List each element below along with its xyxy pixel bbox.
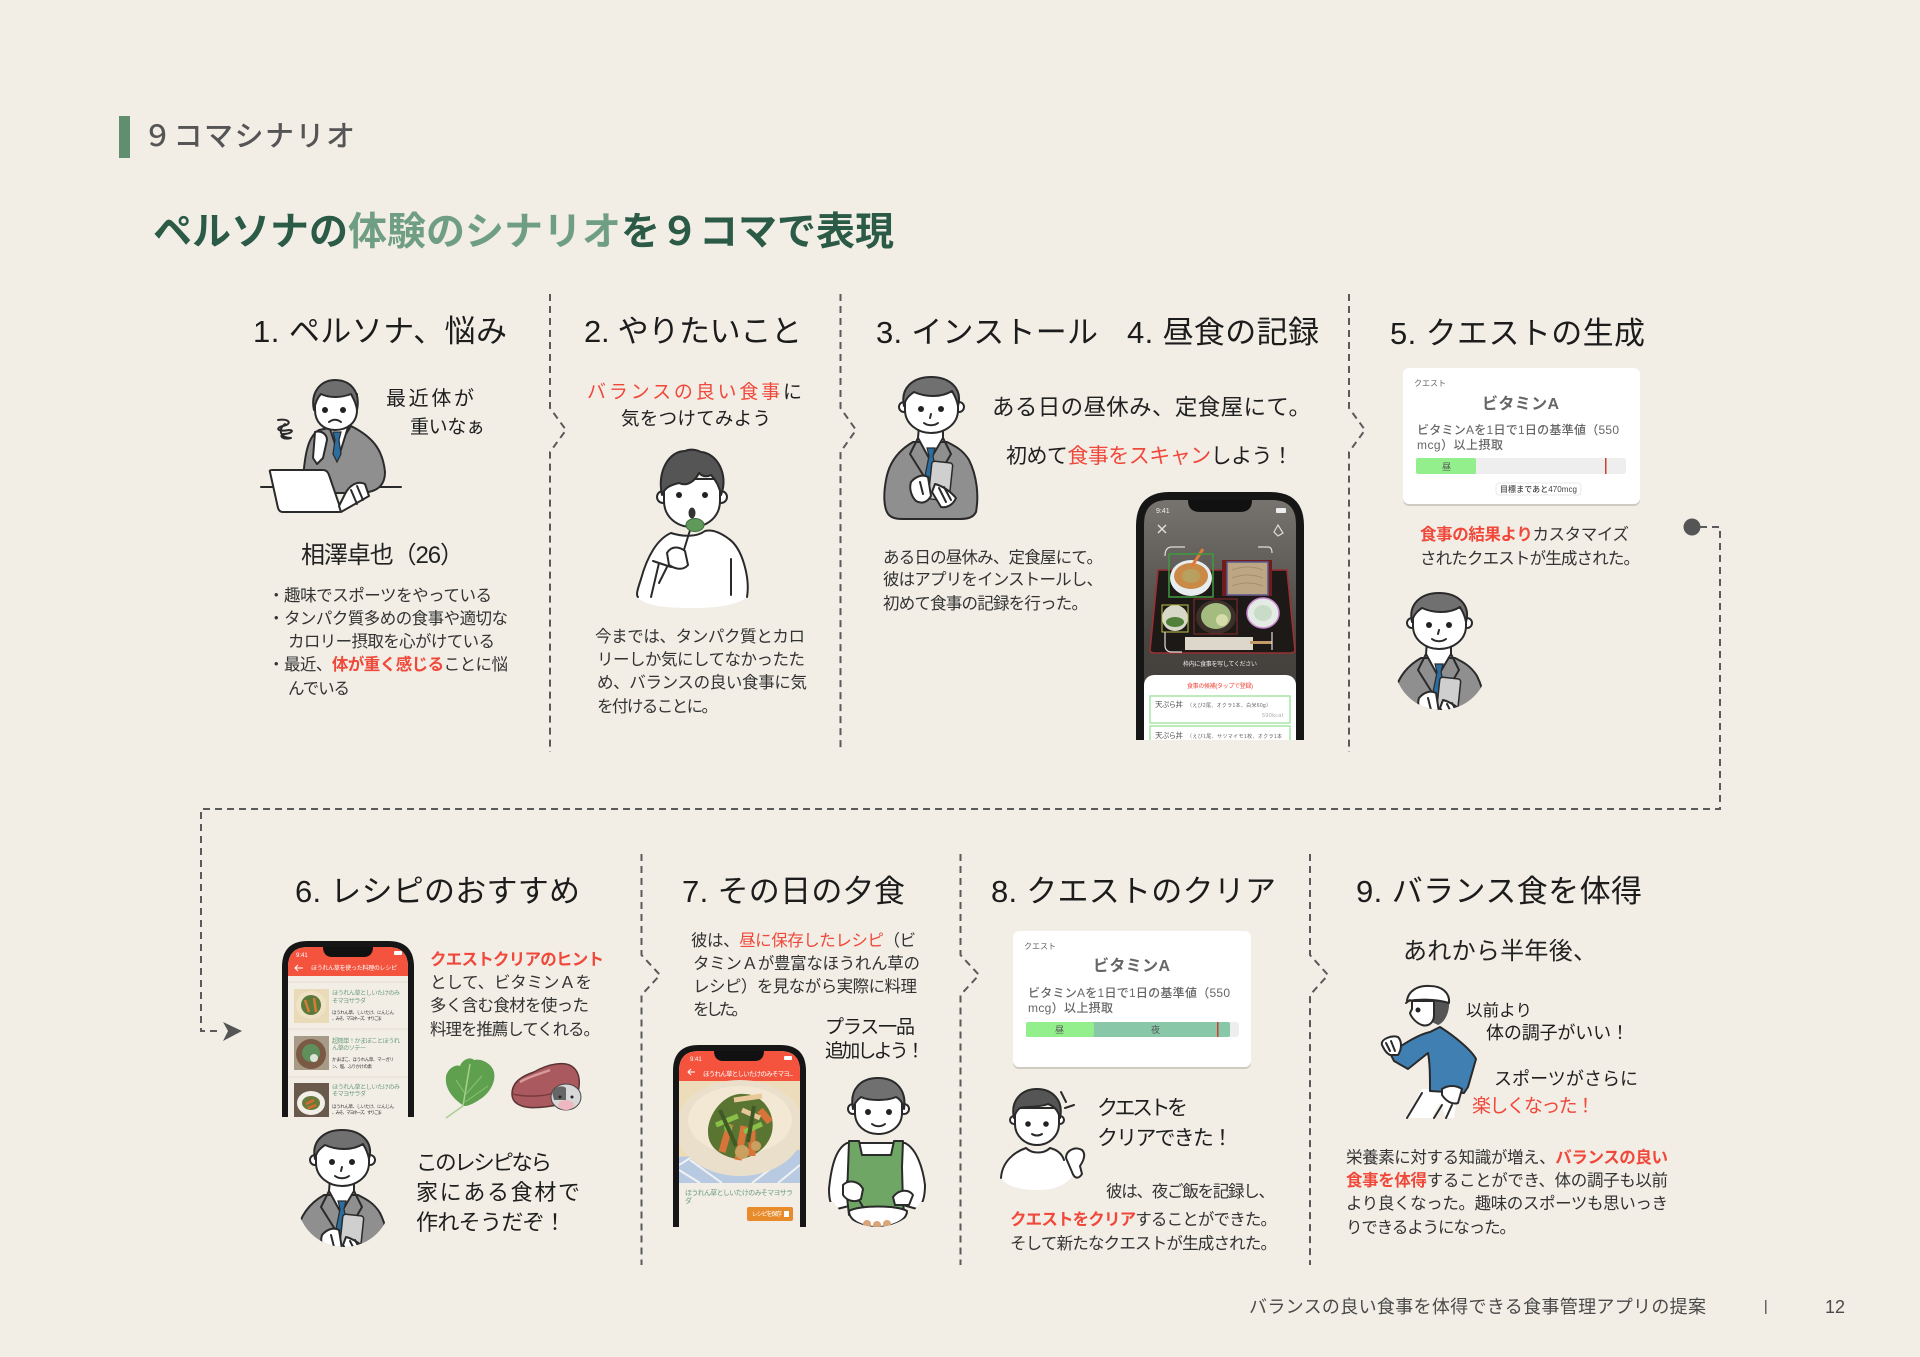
quest card: mcg）以上摂取 [1417, 437, 1503, 452]
phone: recipe list: 、みそ、マヨネーズ、すりごま [332, 1015, 382, 1022]
speech: cleared the quest: クリアできた！ [1097, 1127, 1233, 1150]
phone: recipe detail: ほうれん草としいたけのみそマヨ... [703, 1069, 793, 1078]
panel: step 9 balanced diet mastered [1346, 874, 1668, 1237]
quest card cleared: 夜 [1151, 1025, 1160, 1035]
main title: ペルソナの体験のシナリオを９コマで表現 [153, 211, 894, 254]
infographic page [119, 116, 1844, 1315]
recipe 1 [294, 989, 329, 1023]
heading: step 3: 3. インストール [876, 315, 1098, 350]
phone: meal scan screen: 9:41 [1156, 508, 1170, 515]
recipe hint description: として、ビタミンＡを [430, 973, 592, 992]
quest card cleared: ビタミンAを1日で1日の基準値（550 [1028, 985, 1230, 1000]
phone: meal scan screen: 天ぷら丼 [1155, 699, 1184, 709]
recipe hint description: クエストクリアのヒント [430, 950, 604, 969]
step 7 description: をした。 [693, 1000, 748, 1019]
phone: recipe list: ほうれん草、しいたけ、にんじん [332, 1103, 394, 1110]
icon: worried man at laptop [261, 380, 401, 512]
persona bullets: カロリー摂取を心がけている [288, 632, 495, 651]
divider arrow 7-8 [960, 854, 979, 1265]
quest card: ビタミンA [1482, 394, 1559, 413]
step 2 description [595, 627, 807, 716]
phone: recipe detail: 9:41 [690, 1057, 702, 1063]
quest card cleared: クエスト [1024, 942, 1056, 951]
phone: recipe detail: レシピを保存 [752, 1210, 782, 1218]
panel: step 6 recipe recommendation [282, 874, 604, 1272]
speech: balanced diet [587, 381, 802, 429]
divider arrow 8-9 [1310, 854, 1328, 1265]
step 2 description: 今までは、タンパク質とカロ [595, 627, 805, 646]
heading: step 2: 2. やりたいこと [584, 314, 802, 349]
speech: can make with ingredients at home [416, 1151, 580, 1235]
panel: step 7 dinner [673, 874, 925, 1229]
step 2 description: を付けることに。 [597, 697, 718, 716]
quest card: ビタミンAを1日で1日の基準値（550 [1417, 422, 1619, 437]
persona bullets: ・趣味でスポーツをやっている [268, 586, 492, 605]
quest card [1403, 368, 1640, 506]
step 9 description [1346, 1148, 1668, 1237]
step 5 description [1420, 525, 1640, 568]
recipe hint description [430, 950, 604, 1039]
step 3 description: ある日の昼休み、定食屋にて。 [883, 548, 1103, 567]
phone: recipe list: そマヨサラダ [332, 997, 366, 1005]
panel: step 1 persona [253, 314, 508, 698]
phone: recipe list: ほうれん草としいたけのみ [332, 989, 400, 997]
quest card: クエスト [1414, 379, 1446, 388]
divider arrow 6-7 [642, 854, 660, 1265]
icon: liver and cow [512, 1064, 581, 1110]
step 8 description: クエストをクリアすることができた。 [1010, 1210, 1277, 1229]
speech: body feels heavy: 重いなぁ [410, 416, 485, 438]
step 8 description: 彼は、夜ご飯を記録し、 [1106, 1182, 1275, 1201]
phone: recipe detail [673, 1045, 806, 1227]
phone: recipe list: 、みそ、マヨネーズ、すりごま [332, 1109, 382, 1116]
step 3 description: 彼はアプリをインストールし、 [883, 570, 1103, 589]
phone: recipe list: 超簡単！かまぼことほうれ [332, 1037, 401, 1045]
phone: recipe list: ん草のソテー [332, 1044, 366, 1052]
phone: meal scan screen: 天ぷら丼 [1155, 730, 1184, 740]
heading: step 4: 4. 昼食の記録 [1127, 315, 1319, 350]
icon: man with smartphone [884, 377, 977, 519]
icon: man with smartphone [300, 1129, 385, 1247]
quest card cleared: mcg）以上摂取 [1028, 1000, 1113, 1015]
speech: add one more dish: プラス一品 [825, 1016, 915, 1038]
recipe hint description: 多く含む食材を使った [430, 996, 589, 1015]
step 3 description: 初めて食事の記録を行った。 [883, 594, 1088, 613]
step 7 description [691, 931, 920, 1019]
phone: meal scan screen [1136, 492, 1304, 755]
phone: recipe detail: ほうれん草としいたけのみそマヨサラ [685, 1188, 793, 1197]
footer: 12 [1825, 1297, 1845, 1317]
speech: can make with ingredients at home: 家にある食材で [416, 1180, 580, 1205]
panel: step 2 want to do [584, 314, 807, 716]
step 3 description [883, 548, 1103, 613]
speech: sports more fun [1472, 1069, 1638, 1117]
phone: meal scan screen: （えび2尾、オクラ1本、白米60g） [1187, 702, 1271, 709]
phone: recipe list: そマヨサラダ [332, 1090, 366, 1098]
persona bullets: ・最近、体が重く感じることに悩 [268, 654, 508, 674]
phone: recipe list: ほうれん草を使った料理のレシピ [311, 964, 397, 972]
speech: body feels heavy [386, 387, 485, 438]
speech: balanced diet: 気をつけてみよう [621, 408, 771, 429]
dish photo [679, 1081, 800, 1157]
recipe 2 [294, 1036, 329, 1070]
recipe 3 [294, 1083, 329, 1117]
step 9 description: 食事を体得することができ、体の調子も以前 [1346, 1171, 1668, 1190]
step 9 description: 栄養素に対する知識が増え、バランスの良い [1346, 1148, 1668, 1167]
icon: man with smartphone [1398, 592, 1482, 710]
step 7 description: タミンＡが豊富なほうれん草の [693, 954, 920, 973]
step 5 description: 食事の結果よりカスタマイズ [1420, 525, 1629, 544]
row connector arrow [201, 518, 1720, 1041]
recipe hint description: 料理を推薦してくれる。 [430, 1020, 600, 1039]
step 2 description: め、バランスの良い食事に気 [597, 673, 807, 692]
half a year later caption: あれから半年後、 [1403, 938, 1597, 965]
persona bullets [268, 586, 508, 698]
persona name: 相澤卓也（26） [301, 542, 464, 569]
heading: step 6: 6. レシピのおすすめ [295, 874, 580, 909]
icon: boy eating broccoli [637, 450, 748, 608]
icon: running man [1382, 986, 1476, 1118]
heading: step 7: 7. その日の夕食 [682, 874, 905, 909]
quest card: 目標まであと470mcg [1500, 484, 1577, 494]
icon: happy boy raising fist [1001, 1089, 1084, 1190]
phone: recipe detail: ダ [685, 1196, 692, 1205]
phone: meal scan screen: 590kcal [1262, 713, 1283, 719]
phone: recipe list: ほうれん草としいたけのみ [332, 1083, 400, 1091]
speech: body feels heavy: 最近体が [386, 387, 474, 410]
divider arrow 4-5 [1349, 294, 1365, 752]
persona bullets: んでいる [288, 680, 350, 698]
step 9 description: より良くなった。趣味のスポーツも思いっき [1346, 1194, 1668, 1213]
step 7 description: レシピ）を見ながら実際に料理 [693, 977, 917, 996]
phone: meal scan screen: 枠内に食事を写してください [1183, 660, 1257, 668]
phone: recipe list [282, 941, 414, 1117]
step 2 description: リーしか気にしてなかったた [597, 650, 805, 669]
divider arrow 1-2 [550, 294, 566, 752]
speech: add one more dish: 追加しよう！ [825, 1040, 925, 1062]
persona bullets: ・タンパク質多めの食事や適切な [268, 609, 508, 628]
phone: meal scan screen: 食事の候補(タップで登録) [1187, 682, 1253, 690]
panel: step 5 quest generated [1390, 316, 1645, 735]
speech: can make with ingredients at home: このレシピなら [416, 1151, 552, 1175]
scan tray [1150, 570, 1295, 653]
speech: sports more fun: スポーツがさらに [1494, 1069, 1638, 1089]
icon: man cooking in apron [829, 1078, 925, 1229]
panel: step 3 and 4 install and lunch [876, 315, 1319, 755]
phone: recipe list: かまぼこ、ほうれん草、マーガリ [332, 1056, 394, 1063]
section label: ９コマシナリオ [143, 121, 355, 153]
result panel [1144, 675, 1296, 740]
step 7 description: 彼は、昼に保存したレシピ（ビ [691, 931, 916, 950]
phone: meal scan screen: （えび1尾、サツマイモ1枚、オクラ1本 [1187, 733, 1282, 740]
speech: cleared the quest [1097, 1097, 1233, 1150]
heading: step 5: 5. クエストの生成 [1390, 316, 1645, 351]
step 8 description [1010, 1182, 1277, 1253]
phone: recipe list: 9:41 [296, 953, 308, 959]
heading: step 1: 1. ペルソナ、悩み [253, 314, 507, 349]
quest card cleared: 昼 [1055, 1025, 1064, 1035]
heading: step 8: 8. クエストのクリア [991, 874, 1276, 909]
speech: feeling better: 以前より [1466, 1001, 1532, 1020]
step 5 description: されたクエストが生成された。 [1420, 549, 1640, 568]
panel: step 8 quest clear [991, 874, 1277, 1253]
speech: add one more dish [825, 1016, 925, 1062]
heading: step 9: 9. バランス食を体得 [1356, 874, 1642, 909]
footer: バランスの良い食事を体得できる食事管理アプリの提案 [1249, 1297, 1706, 1317]
speech: feeling better: 体の調子がいい！ [1486, 1023, 1629, 1043]
quest card: 昼 [1442, 462, 1451, 472]
speech: balanced diet: バランスの良い食事に [587, 381, 802, 403]
icon: spinach leaf [446, 1058, 494, 1118]
step 8 description: そして新たなクエストが生成された。 [1010, 1234, 1277, 1253]
speech: scan meal: 初めて食事をスキャンしよう！ [1006, 445, 1293, 468]
speech: can make with ingredients at home: 作れそうだぞ！ [416, 1210, 566, 1235]
phone: recipe list: ン、塩、ふりかけの素 [332, 1063, 372, 1070]
speech: feeling better [1466, 1001, 1629, 1043]
speech: sports more fun: 楽しくなった！ [1472, 1095, 1595, 1117]
divider arrow 2-3 [840, 294, 856, 752]
quest card cleared: ビタミンA [1093, 956, 1170, 975]
quest card cleared [1013, 931, 1251, 1069]
phone: recipe list: ほうれん草、しいたけ、にんじん [332, 1009, 394, 1016]
speech: cleared the quest: クエストを [1097, 1097, 1188, 1120]
section marker bar [119, 116, 130, 158]
step 9 description: りできるようになった。 [1346, 1218, 1516, 1237]
speech: at lunch: ある日の昼休み、定食屋にて。 [992, 395, 1311, 420]
